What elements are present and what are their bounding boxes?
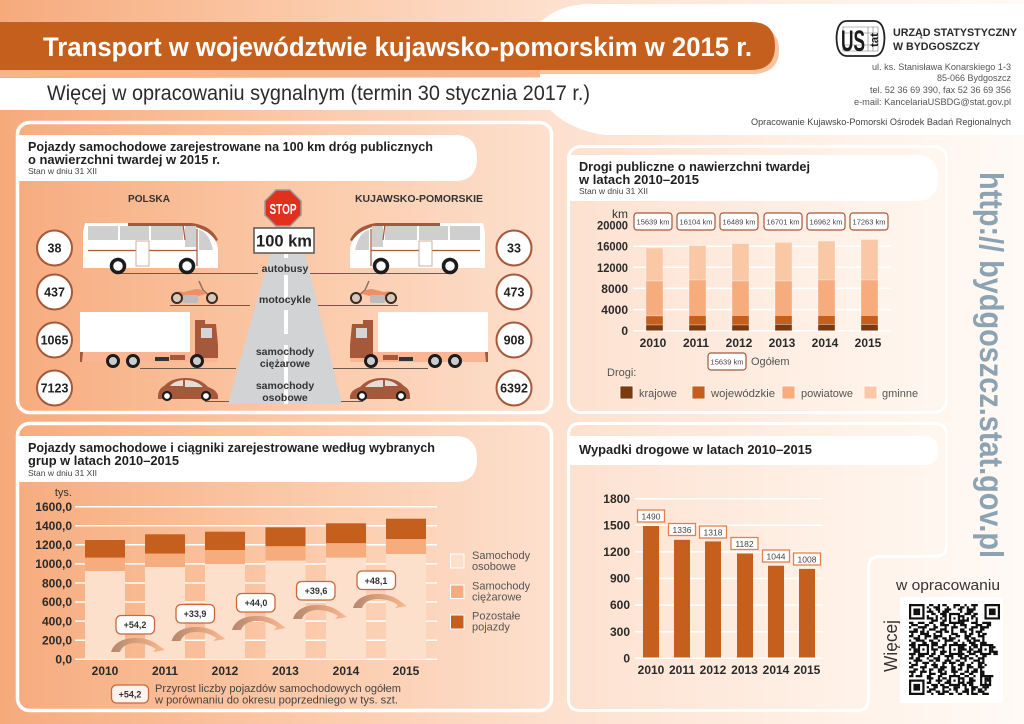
growth callouts: +54,2 bbox=[124, 620, 146, 630]
logo: Urząd Statystyczny: US bbox=[841, 25, 865, 58]
sign: 100 km bbox=[254, 228, 314, 253]
heading: registered vehicles: Pojazdy samochodowe i ciągniki zarejestrowane według wybranych bbox=[28, 440, 435, 455]
icon: car Kujawsko-Pomorskie bbox=[350, 378, 410, 400]
legend: total bbox=[708, 353, 790, 370]
legend: road types bbox=[607, 367, 918, 400]
bar chart: accidents: 2015 bbox=[794, 663, 821, 677]
bar chart: accidents: 900 bbox=[610, 572, 630, 586]
growth callouts: +44,0 bbox=[245, 598, 267, 608]
bar chart: accidents: 1490 bbox=[642, 512, 661, 522]
legend: vehicle groups: Pozostałe bbox=[472, 610, 520, 622]
bar chart: accidents: 1008 bbox=[798, 554, 817, 564]
stacked bar chart: roads: 2013 bbox=[769, 336, 796, 350]
stacked bar chart: roads: 15639 km bbox=[637, 218, 669, 226]
stacked bar chart: vehicles: 1000,0 bbox=[35, 557, 72, 571]
growth callouts: +48,1 bbox=[365, 576, 387, 586]
contact details: ul. ks. Stanisława Konarskiego 1-3 bbox=[872, 62, 1011, 73]
icon: bus Kujawsko-Pomorskie bbox=[350, 223, 485, 272]
heading: vehicles per 100 km: Pojazdy samochodowe zarejestrowane na 100 km dróg publicznych bbox=[28, 139, 433, 154]
stacked bar chart: roads: 2015 bbox=[855, 336, 882, 350]
bar chart: accidents: 2010 bbox=[638, 663, 665, 677]
label: Polska: POLSKA bbox=[128, 193, 170, 205]
heading: road accidents bbox=[570, 436, 938, 465]
sign: 100 km: 100 km bbox=[256, 232, 312, 250]
stacked bar chart: vehicles: 1400,0 bbox=[35, 519, 72, 533]
growth arrows bbox=[111, 594, 407, 652]
stacked bar chart: vehicles: 2015 bbox=[393, 664, 420, 678]
title banner: Transport w województwie kujawsko-pomorskim w 2015 r. bbox=[43, 32, 752, 62]
stacked bar chart: vehicles: 200,0 bbox=[42, 634, 72, 648]
legend: vehicle groups: Samochody bbox=[472, 580, 531, 592]
heading: vehicles per 100 km bbox=[19, 135, 477, 181]
label: Kujawsko-Pomorskie: KUJAWSKO-POMORSKIE bbox=[355, 193, 483, 205]
legend: vehicle groups bbox=[450, 550, 531, 634]
stacked bar chart: vehicles: 2013 bbox=[272, 664, 299, 678]
values: Polska bbox=[37, 230, 72, 406]
stacked bar chart: roads: 2014 bbox=[812, 336, 839, 350]
icon: motorcycle Polska bbox=[172, 281, 217, 303]
heading: vehicles per 100 km: Stan w dniu 31 XII bbox=[28, 166, 97, 176]
heading: public roads bbox=[570, 155, 938, 201]
road labels bbox=[256, 263, 314, 404]
legend: road types: wojewódzkie bbox=[710, 388, 775, 400]
legend: road types: Drogi: bbox=[607, 367, 636, 379]
bar chart: accidents: 2011 bbox=[669, 663, 695, 677]
values: Kujawsko-Pomorskie bbox=[496, 230, 532, 406]
icon: truck Polska bbox=[80, 312, 218, 366]
icon: bus Polska bbox=[83, 223, 218, 272]
bar chart: accidents: 2014 bbox=[763, 663, 790, 677]
stacked bar chart: vehicles: 800,0 bbox=[42, 576, 72, 590]
legend: road types: powiatowe bbox=[801, 388, 853, 400]
bar chart: accidents: 300 bbox=[610, 625, 630, 639]
stacked bar chart: roads: km bbox=[612, 207, 628, 221]
icon: truck Kujawsko-Pomorskie bbox=[350, 312, 488, 366]
icon: motorcycle Kujawsko-Pomorskie bbox=[351, 281, 396, 303]
contact details bbox=[751, 62, 1011, 128]
heading: registered vehicles bbox=[19, 436, 477, 482]
values: Polska: 38 bbox=[48, 242, 61, 256]
stacked bar chart: vehicles: 2014 bbox=[333, 664, 360, 678]
road labels: motocykle bbox=[259, 294, 311, 306]
heading: registered vehicles: grup w latach 2010–2015 bbox=[28, 453, 179, 468]
subtitle: Więcej w opracowaniu sygnalnym (termin 30 stycznia 2017 r.) bbox=[47, 82, 590, 105]
heading: public roads: Stan w dniu 31 XII bbox=[579, 186, 648, 196]
heading: vehicles per 100 km: o nawierzchni twardej w 2015 r. bbox=[28, 152, 220, 167]
bar chart: accidents: 1500 bbox=[603, 518, 630, 532]
bar chart: accidents: 1044 bbox=[767, 552, 786, 562]
leader lines bbox=[120, 274, 448, 402]
stacked bar chart: vehicles: 1200,0 bbox=[35, 538, 72, 552]
road labels: ciężarowe bbox=[260, 358, 310, 370]
note: growth explanation: w porównaniu do okresu poprzedniego w tys. szt. bbox=[154, 694, 398, 706]
icon: stop sign: STOP bbox=[270, 201, 296, 218]
icon: stop sign bbox=[265, 190, 301, 226]
institution name bbox=[893, 27, 1018, 53]
panel: public roads bbox=[568, 146, 946, 412]
stacked bar chart: roads: 16104 km bbox=[680, 218, 712, 226]
legend: total: 15639 km bbox=[711, 358, 743, 366]
legend: vehicle groups: osobowe bbox=[472, 561, 516, 573]
stacked bar chart: roads bbox=[597, 207, 891, 350]
growth callouts: +39,6 bbox=[305, 586, 327, 596]
bar chart: accidents: 600 bbox=[610, 598, 630, 612]
legend: road types: gminne bbox=[882, 388, 918, 400]
stacked bar chart: roads: 2011 bbox=[683, 336, 709, 350]
institution name: W BYDGOSZCZY bbox=[893, 41, 981, 53]
label: Więcej: Więcej bbox=[881, 620, 901, 672]
values: Polska: 1065 bbox=[41, 334, 68, 348]
stacked bar chart: roads: 2012 bbox=[726, 336, 753, 350]
stacked bar chart: vehicles: 2011 bbox=[152, 664, 178, 678]
legend: vehicle groups: Samochody bbox=[472, 550, 531, 562]
contact details: 85-066 Bydgoszcz bbox=[937, 73, 1011, 84]
stacked bar chart: roads: 0 bbox=[621, 324, 628, 338]
bar chart: accidents: 0 bbox=[623, 652, 630, 666]
stacked bar chart: roads: 16000 bbox=[597, 240, 628, 254]
panel: registered vehicles bbox=[18, 424, 552, 710]
stacked bar chart: roads: 16701 km bbox=[767, 218, 799, 226]
bar chart: accidents: 1200 bbox=[603, 545, 630, 559]
stacked bar chart: vehicles: 1600,0 bbox=[35, 500, 72, 514]
road labels: autobusy bbox=[262, 263, 308, 275]
heading: public roads: Drogi publiczne o nawierzchni twardej bbox=[579, 159, 810, 174]
bar chart: accidents bbox=[603, 492, 823, 677]
values: Kujawsko-Pomorskie: 33 bbox=[507, 242, 521, 256]
stacked bar chart: roads: 20000 bbox=[597, 218, 628, 232]
stacked bar chart: roads: 17263 km bbox=[853, 218, 885, 226]
note: growth explanation: +54,2 bbox=[119, 690, 141, 700]
road labels: samochody bbox=[256, 380, 314, 392]
stacked bar chart: roads: 4000 bbox=[601, 303, 628, 317]
stacked bar chart: vehicles bbox=[35, 487, 437, 678]
bar chart: accidents: 2012 bbox=[700, 663, 727, 677]
stacked bar chart: vehicles: 2010 bbox=[92, 664, 119, 678]
values: Kujawsko-Pomorskie: 908 bbox=[504, 334, 524, 348]
bar chart: accidents: 1336 bbox=[673, 525, 692, 535]
legend: vehicle groups: ciężarowe bbox=[472, 592, 522, 604]
panel: vehicles per 100 km bbox=[18, 122, 552, 412]
heading: road accidents: Wypadki drogowe w latach 2010–2015 bbox=[579, 442, 812, 457]
stacked bar chart: roads: 16489 km bbox=[723, 218, 755, 226]
heading: public roads: w latach 2010–2015 bbox=[578, 172, 699, 187]
panel: road accidents bbox=[568, 424, 946, 710]
stacked bar chart: vehicles: 400,0 bbox=[42, 614, 72, 628]
road labels: samochody bbox=[256, 346, 314, 358]
header white shape bbox=[0, 4, 1024, 135]
institution name: URZĄD STATYSTYCZNY bbox=[893, 27, 1018, 39]
contact details: e-mail: KancelariaUSBDG@stat.gov.pl bbox=[854, 97, 1011, 108]
bar chart: accidents: 2013 bbox=[731, 663, 758, 677]
legend: road types: krajowe bbox=[639, 388, 677, 400]
road labels: osobowe bbox=[262, 392, 308, 404]
values: Polska: 7123 bbox=[41, 382, 68, 396]
icon: car Polska bbox=[158, 378, 218, 400]
road bbox=[228, 254, 342, 404]
label: w opracowaniu: w opracowaniu bbox=[895, 578, 1000, 594]
contact details: Opracowanie Kujawsko-Pomorski Ośrodek Badań Regionalnych bbox=[751, 117, 1011, 128]
values: Polska: 437 bbox=[44, 286, 65, 300]
legend: vehicle groups: pojazdy bbox=[472, 622, 510, 634]
legend: total: Ogółem bbox=[751, 356, 790, 368]
values: Kujawsko-Pomorskie: 6392 bbox=[500, 382, 528, 396]
values: Kujawsko-Pomorskie: 473 bbox=[504, 286, 524, 300]
vertical url: http:// bydgoszcz.stat.gov.pl bbox=[973, 172, 1010, 558]
note: growth explanation: Przyrost liczby pojazdów samochodowych ogółem bbox=[155, 683, 401, 695]
growth callouts: +33,9 bbox=[184, 609, 206, 619]
heading: registered vehicles: Stan w dniu 31 XII bbox=[28, 468, 97, 478]
stacked bar chart: roads: 8000 bbox=[601, 282, 628, 296]
stacked bar chart: roads: 16962 km bbox=[810, 218, 842, 226]
bar chart: accidents: 1182 bbox=[735, 539, 754, 549]
note: growth explanation bbox=[112, 683, 401, 706]
stacked bar chart: vehicles: 0,0 bbox=[55, 652, 72, 666]
bar chart: accidents: 1318 bbox=[704, 528, 723, 538]
logo: Urząd Statystyczny: tat bbox=[869, 33, 881, 47]
stacked bar chart: roads: 2010 bbox=[640, 336, 667, 350]
stacked bar chart: vehicles: 600,0 bbox=[42, 595, 72, 609]
QR code bbox=[900, 597, 1003, 703]
stacked bar chart: vehicles: tys. bbox=[55, 487, 72, 499]
title banner bbox=[0, 22, 779, 77]
stacked bar chart: roads: 12000 bbox=[597, 261, 628, 275]
growth callouts bbox=[116, 571, 396, 634]
stacked bar chart: vehicles: 2012 bbox=[212, 664, 239, 678]
bar chart: accidents: 1800 bbox=[603, 492, 630, 506]
contact details: tel. 52 36 69 390, fax 52 36 69 356 bbox=[870, 85, 1011, 96]
